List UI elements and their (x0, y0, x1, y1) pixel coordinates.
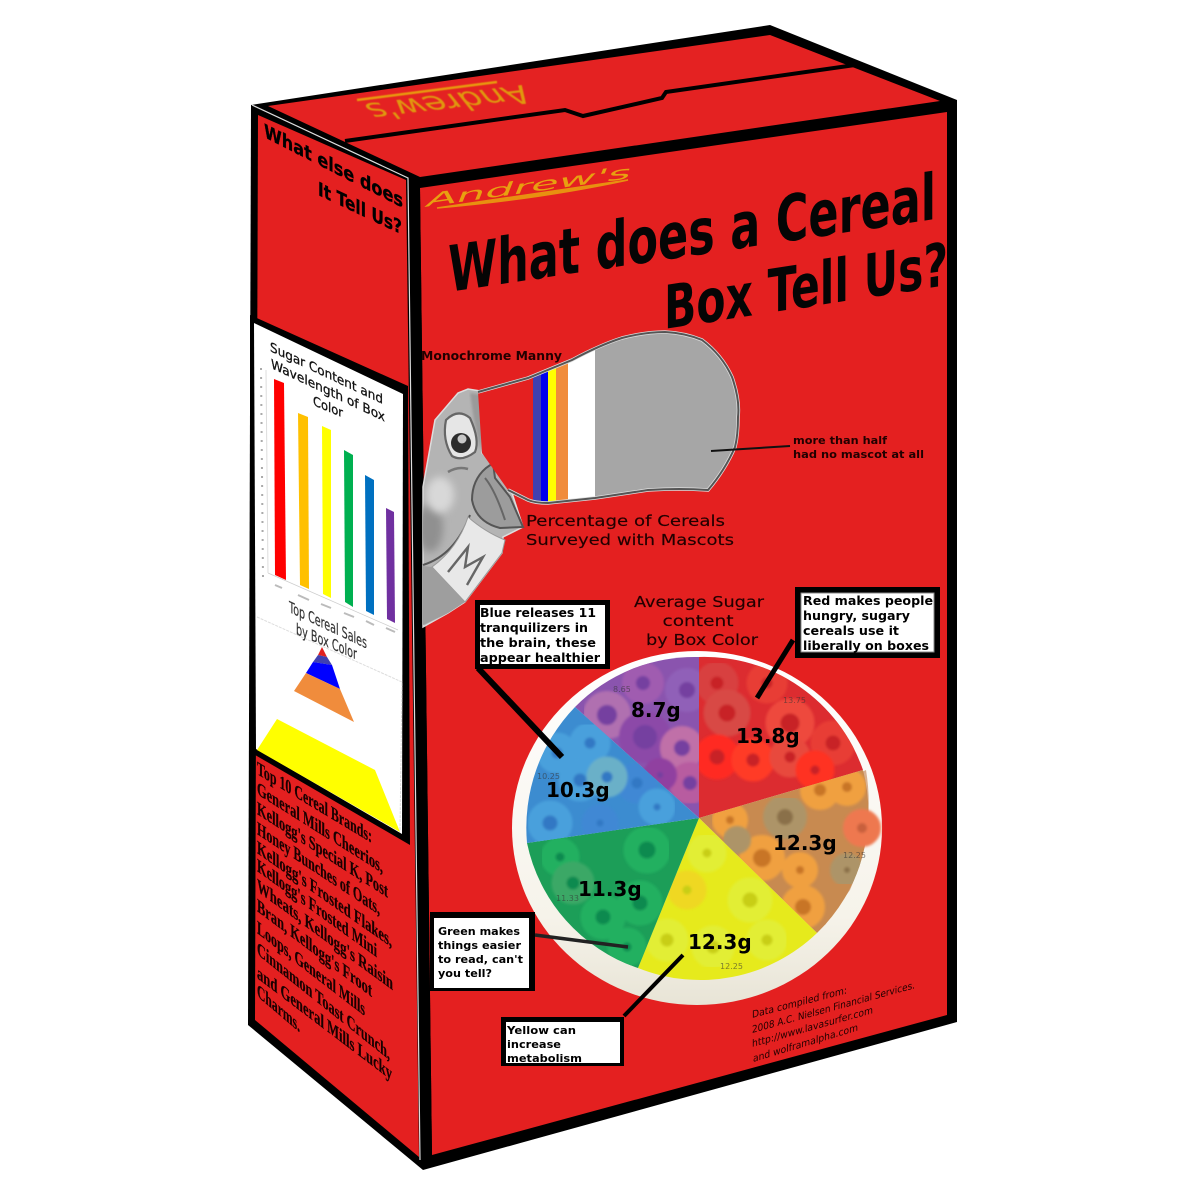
no-mascot callout: had no mascot at all (793, 448, 924, 461)
callout: red: liberally on boxes (803, 639, 929, 653)
pie chart heading: Average Sugar (634, 593, 765, 611)
corner edge highlight (252, 105, 420, 1160)
callout: blue: Blue releases 11 (480, 606, 596, 620)
callout: red: Red makes people (803, 594, 933, 608)
sector: yellow (638, 818, 817, 980)
mascot chart caption (526, 512, 734, 549)
pyramid title (288, 597, 367, 664)
callout: red: hungry, sugary (803, 609, 910, 623)
mascot head (416, 389, 523, 627)
Andrew's brand logo (422, 161, 636, 212)
sector: red (699, 656, 863, 818)
callout: green: to read, can't (438, 953, 523, 966)
top flap line (345, 65, 855, 141)
mascot chart caption: Surveyed with Mascots (526, 531, 734, 549)
sector values: 13.75 (783, 696, 806, 705)
pie chart heading: content (662, 612, 734, 630)
chart title: Sugar Content and (270, 340, 383, 408)
sector values (537, 685, 866, 971)
data sources note (752, 980, 915, 1065)
data sources note: 2008 A.C. Nielsen Financial Services. (752, 980, 915, 1036)
corner edge band (408, 180, 432, 1168)
side heading: What else does (264, 119, 403, 213)
no-mascot callout (711, 434, 924, 461)
top 10 brands text: Kellogg's Special K, Post (257, 797, 388, 902)
beak chart: percentage with mascots (478, 330, 743, 505)
cereal box infographic (248, 25, 957, 1170)
top 10 brands text: Cinnamon Toast Crunch, (257, 937, 390, 1065)
sector values: 10.3g (546, 778, 610, 802)
sector values: 13.8g (736, 724, 800, 748)
pie chart: average sugar by box colour (520, 650, 885, 985)
pyramid chart: sales by box colour (257, 647, 400, 832)
callout: blue (475, 600, 610, 757)
upside-down Andrew's brand (357, 79, 540, 127)
callout: yellow: metabolism (507, 1052, 582, 1065)
overflowing cereal loop (850, 816, 874, 840)
callout: green: you tell? (438, 967, 492, 980)
sector values: 10.25 (537, 772, 560, 781)
mascot name label: Monochrome Manny (421, 349, 562, 363)
no-mascot callout: more than half (793, 434, 887, 447)
sector values: 8.7g (631, 698, 681, 722)
callout: yellow: Yellow can (506, 1024, 576, 1037)
top 10 brands text: Kellogg's Frosted Mini (257, 854, 377, 962)
chart title: Color (313, 393, 343, 422)
pyramid title: by Box Color (296, 620, 357, 664)
callout: blue: the brain, these (480, 636, 596, 650)
top 10 brands text: Kellogg's Frosted Flakes, (257, 836, 392, 952)
top 10 brands text: Top 10 Cereal Brands: (257, 758, 372, 848)
mascot face details (423, 413, 523, 565)
data sources note: and wolframalpha.com (753, 1023, 858, 1065)
main title: Box Tell Us? (664, 230, 948, 344)
top 10 brands text (257, 758, 393, 1085)
mascot: Monochrome Manny toucan (416, 330, 743, 627)
top panel of box (268, 30, 940, 177)
sector values: 12.25 (720, 962, 743, 971)
callout: green: things easier (438, 939, 522, 952)
sector values: 12.3g (773, 831, 837, 855)
callout: blue: appear healthier (480, 651, 600, 665)
sector: orange (699, 770, 868, 933)
callout: yellow (501, 955, 683, 1066)
mascot chart caption: Percentage of Cereals (526, 512, 725, 530)
main title (448, 160, 948, 344)
main title: What does a Cereal (448, 160, 936, 308)
top 10 brands text: General Mills Cheerios, (257, 778, 383, 878)
pie chart heading: by Box Color (646, 631, 759, 649)
callout: green (430, 912, 628, 991)
callout: yellow: increase (507, 1038, 561, 1051)
sector values: 12.25 (843, 851, 866, 860)
cereal bowl (512, 651, 882, 1005)
sector values: 11.33 (556, 894, 579, 903)
flap seam (770, 30, 855, 65)
side heading: It Tell Us? (318, 177, 402, 239)
pie chart heading (634, 593, 765, 649)
top 10 brands text: and General Mills Lucky (257, 961, 392, 1085)
upside-down Andrew's brand: Andrew's (357, 79, 540, 127)
top 10 brands text: Loops, General Mills (257, 916, 365, 1021)
top 10 brands text: Charms. (257, 979, 300, 1037)
data sources note: Data compiled from: (752, 985, 847, 1021)
sector: blue (526, 707, 699, 843)
top 10 brands text: Bran, Kellogg's Froot (257, 894, 372, 1002)
chart divider (257, 617, 402, 830)
front panel (420, 112, 947, 1155)
box silhouette (248, 25, 957, 1170)
bar chart: sugar by box colour (261, 368, 398, 632)
side chart panel (250, 315, 410, 845)
callout: red: cereals use it (803, 624, 899, 638)
pyramid title: Top Cereal Sales (288, 597, 367, 652)
callout: blue: tranquilizers in (480, 621, 588, 635)
callout: red (757, 587, 940, 698)
sector values: 8.65 (613, 685, 631, 694)
sector: green (527, 818, 699, 968)
sector values: 12.3g (688, 930, 752, 954)
mascot collar (423, 517, 505, 625)
data sources note: http://www.lavasurfer.com (752, 1005, 873, 1050)
sector values: 11.3g (578, 877, 642, 901)
top 10 brands text: Honey Bunches of Oats, (257, 817, 380, 920)
side panel (255, 115, 419, 1157)
chart title: Wavelength of Box (271, 357, 385, 425)
top 10 brands text: Wheats, Kellogg's Raisin (257, 874, 393, 995)
callout: green: Green makes (438, 925, 520, 938)
Andrew's brand logo: Andrew's (422, 161, 636, 212)
sector: purple (575, 657, 699, 818)
